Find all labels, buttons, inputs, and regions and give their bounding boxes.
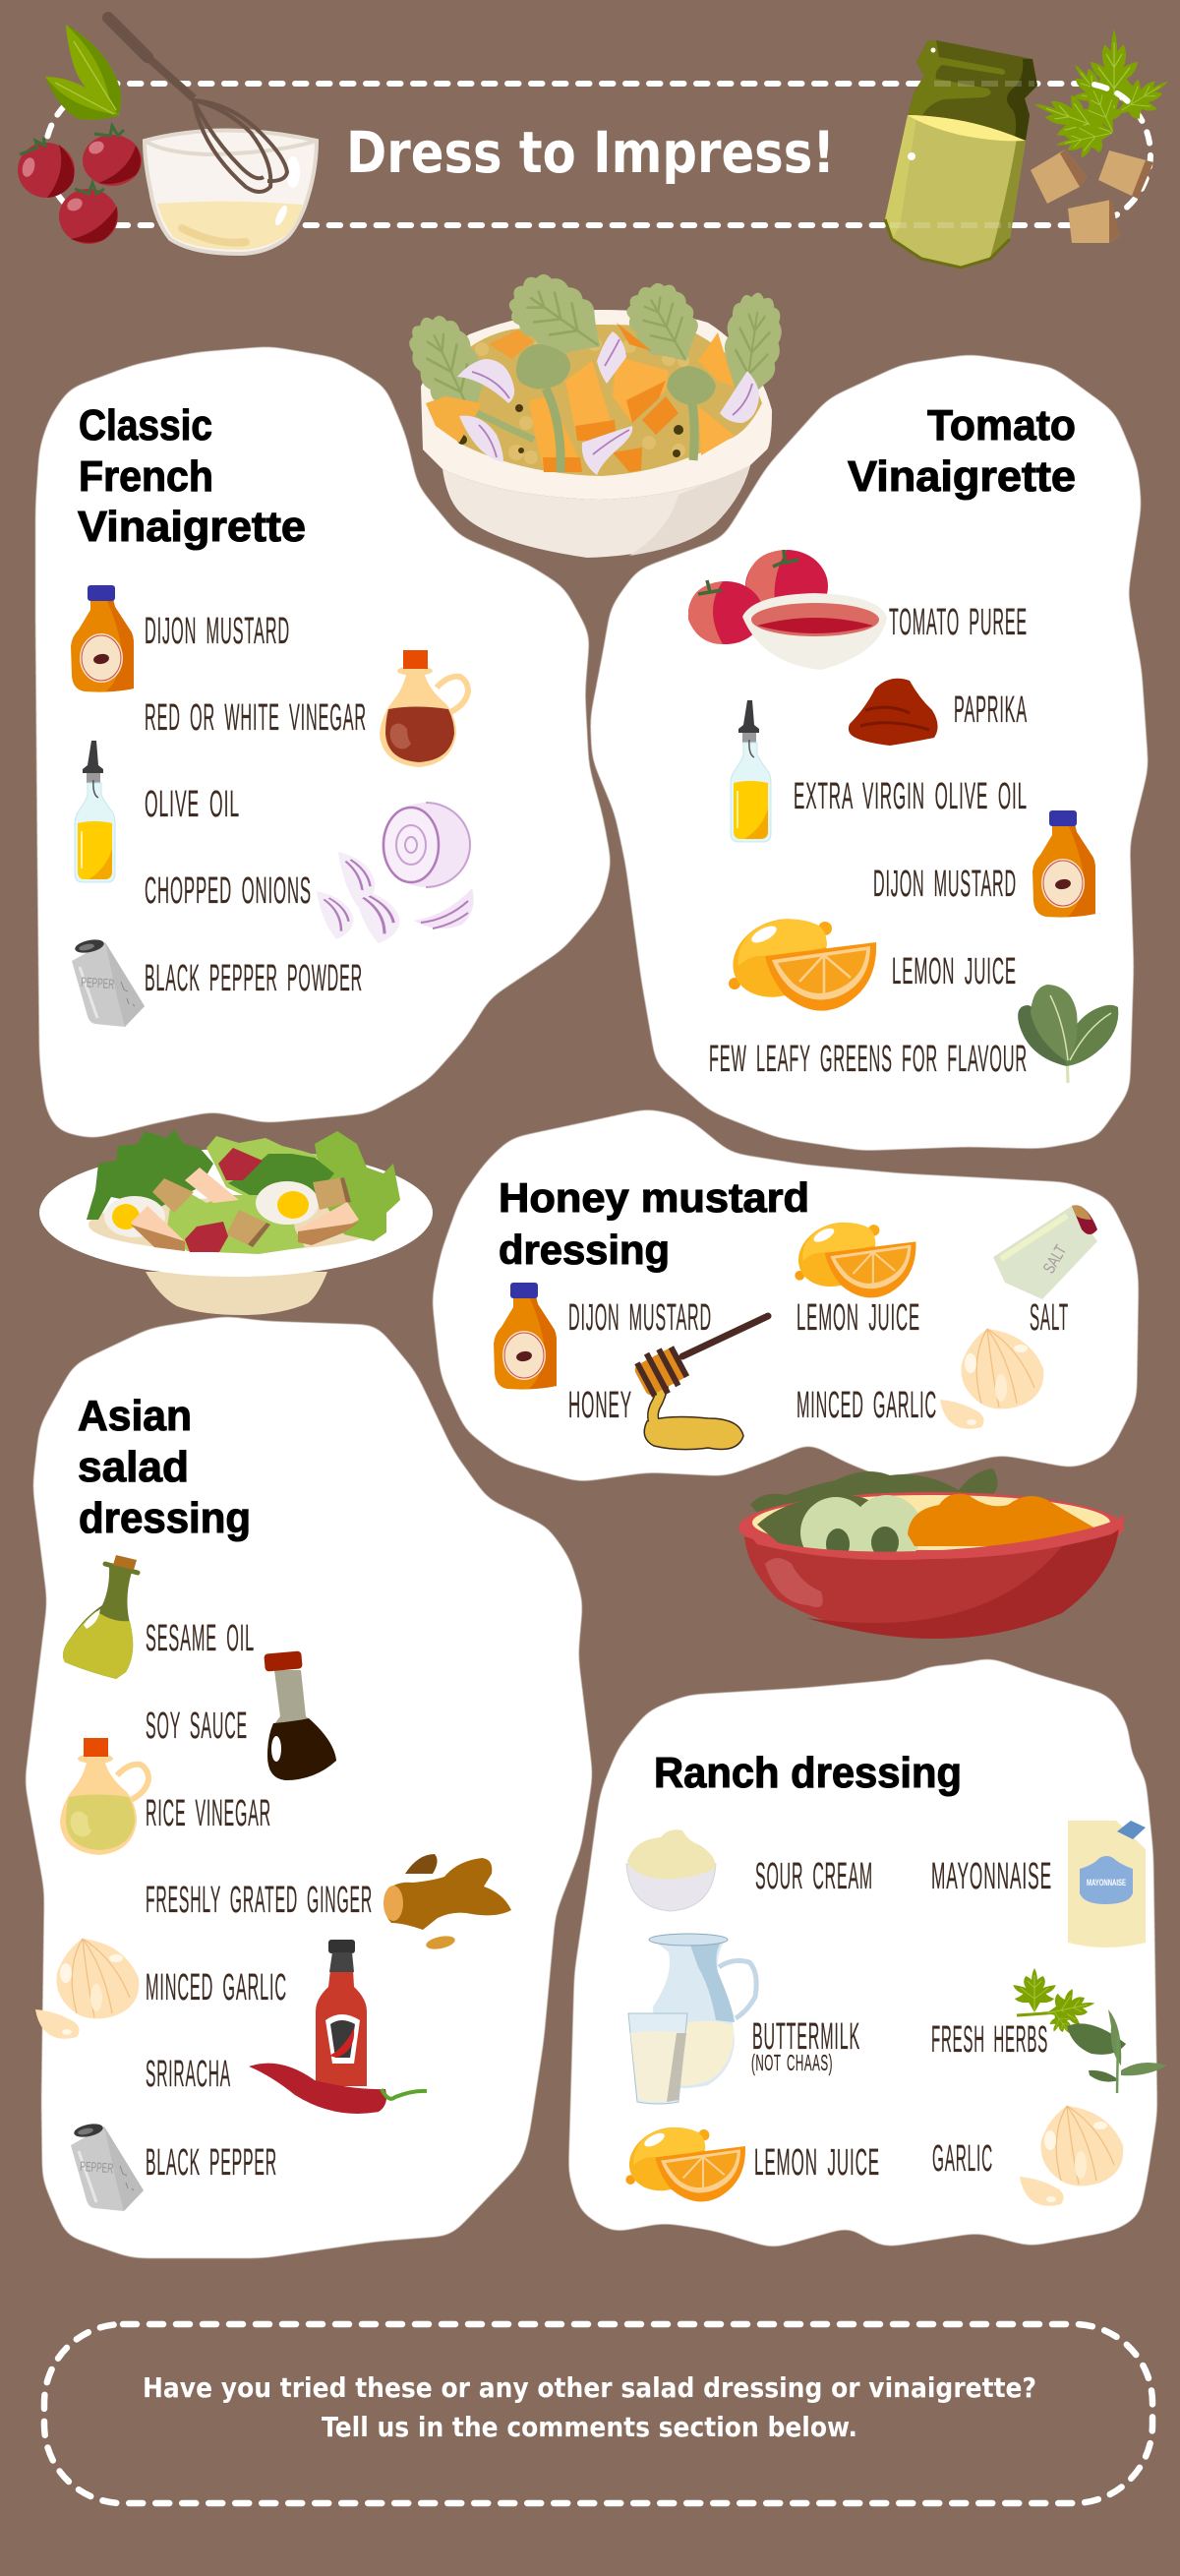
heading: Asian	[78, 1392, 192, 1440]
panel: classic french vinaigrette: OLIVE OIL	[145, 784, 240, 825]
ingredient: minced garlic	[35, 1939, 287, 2039]
icon: lettuce	[87, 1129, 400, 1254]
ingredient: black pepper powder	[72, 937, 363, 1027]
ingredient: rice vinegar	[60, 1738, 271, 1855]
illustration: salad bowl	[398, 261, 788, 558]
ingredient: sesame oil	[63, 1555, 255, 1679]
icon: greens	[750, 1468, 997, 1534]
heading: Classic	[79, 401, 212, 449]
icon: cherry tomatoes	[18, 126, 142, 244]
ingredient: black pepper	[71, 2122, 277, 2211]
panel: asian salad dressing: SESAME OIL	[146, 1618, 255, 1659]
ingredient: salt: SALT	[1030, 1297, 1069, 1339]
bowl body	[442, 465, 750, 558]
panel: ranch dressing: BUTTERMILK	[752, 2016, 860, 2058]
ingredient: freshly grated ginger	[146, 1854, 511, 1951]
icon: glass mixing bowl	[145, 130, 317, 254]
icon: bowl body	[744, 1525, 1119, 1639]
heading	[78, 401, 306, 551]
icon: bowl rim	[738, 1492, 1124, 1563]
icon: basil leaves	[45, 25, 121, 120]
callout dashed frame	[44, 2324, 1152, 2503]
icon: chicken strips	[131, 1168, 359, 1251]
heading: French	[79, 452, 213, 501]
icon: croutons	[1031, 150, 1153, 243]
ingredient: lemon juice	[789, 1211, 920, 1339]
panel: ranch dressing: LEMON JUICE	[754, 2142, 880, 2184]
header dashed frame	[45, 84, 1150, 225]
heading	[78, 1392, 251, 1542]
panel: asian salad dressing: RICE VINEGAR	[146, 1793, 271, 1834]
panel: honey mustard dressing: LEMON JUICE	[796, 1297, 920, 1339]
ingredient: salt: SALT	[1039, 1242, 1070, 1277]
onion pieces	[457, 331, 759, 475]
heading: Tomato	[927, 401, 1076, 449]
ingredient: olive oil	[75, 741, 240, 882]
broccoli	[516, 344, 716, 472]
ingredient: garlic: GARLIC	[932, 2138, 993, 2180]
header illustration: jar, parsley and croutons	[885, 30, 1177, 268]
ingredient: dijon mustard	[494, 1283, 712, 1390]
lentil shadows	[457, 404, 683, 457]
ingredient: lemon juice	[620, 2117, 880, 2201]
icon: plate	[39, 1149, 433, 1277]
heading: Vinaigrette	[848, 452, 1076, 501]
ingredient: chopped onions: CHOPPED ONIONS	[145, 870, 312, 912]
panel: tomato vinaigrette: LEMON JUICE	[892, 951, 1017, 992]
bowl rim	[421, 310, 772, 500]
illustration: red salad bowl	[738, 1468, 1124, 1639]
panel: honey mustard dressing	[432, 1108, 1139, 1482]
icon: plate base	[146, 1272, 327, 1315]
ingredient: red or white vinegar: RED OR WHITE VINEGAR	[145, 697, 367, 739]
header illustration: whisk in bowl, tomatoes and basil	[18, 18, 317, 254]
icon: olive oil jar	[885, 40, 1037, 268]
panel: asian salad dressing	[25, 1316, 593, 2258]
ingredient: garlic	[932, 2106, 1123, 2206]
icon: orange pile	[908, 1494, 1097, 1546]
heading	[499, 1174, 809, 1273]
ingredient: honey	[568, 1316, 768, 1450]
heading: salad	[78, 1443, 189, 1491]
icon: radish	[185, 1148, 263, 1252]
heading: Vinaigrette	[78, 503, 306, 551]
callout text: Tell us in the comments section below.	[322, 2411, 857, 2443]
ingredient: dijon mustard	[873, 810, 1095, 918]
ingredient: tomato puree	[688, 550, 1028, 670]
ingredient: sriracha	[146, 1940, 427, 2114]
ingredient: freshly grated ginger: FRESHLY GRATED GINGER	[146, 1880, 373, 1921]
panel: classic french vinaigrette: DIJON MUSTARD	[145, 611, 290, 652]
icon: cucumbers	[800, 1495, 922, 1568]
ingredient: red or white vinegar	[145, 650, 468, 767]
salad mass	[433, 325, 762, 476]
ingredient: fresh herbs	[931, 1968, 1167, 2093]
ingredient: soy sauce	[146, 1650, 336, 1780]
panel: tomato vinaigrette: PAPRIKA	[954, 689, 1028, 731]
ingredient: buttermilk: (NOT CHAAS)	[751, 2050, 833, 2075]
ingredient: lemon juice	[721, 905, 1017, 1011]
panel: classic french vinaigrette	[35, 346, 612, 1139]
ingredient: soy sauce: SOY SAUCE	[146, 1706, 248, 1747]
panel: classic french vinaigrette: BLACK PEPPER POWDER	[145, 958, 363, 999]
ingredient: dijon mustard	[71, 585, 290, 692]
ingredient: salt	[993, 1205, 1097, 1339]
heading	[848, 401, 1076, 501]
heading: Honey mustard	[499, 1174, 809, 1221]
illustration: caesar salad plate	[39, 1129, 433, 1315]
panel: ranch dressing	[568, 1657, 1167, 2248]
heading: dressing	[79, 1494, 251, 1542]
ingredient: honey: HONEY	[568, 1385, 632, 1426]
ingredient: buttermilk	[628, 1934, 860, 2104]
ingredient: minced garlic	[796, 1329, 1043, 1429]
heading: dressing	[499, 1227, 670, 1273]
chickpeas	[475, 323, 729, 464]
callout text	[143, 2371, 1036, 2443]
salad leaves	[398, 261, 788, 440]
heading: Ranch dressing	[654, 1749, 962, 1797]
ingredient: minced garlic: MINCED GARLIC	[796, 1385, 937, 1426]
ingredient: paprika	[849, 679, 1028, 746]
ingredient: extra virgin olive oil	[731, 700, 1028, 842]
ingredient: sriracha: SRIRACHA	[146, 2054, 231, 2095]
ingredient: sour cream	[626, 1829, 873, 1911]
icon: croutons	[152, 1177, 351, 1247]
ingredient: mayonnaise: MAYONNAISE	[1087, 1878, 1126, 1887]
panel: asian salad dressing: BLACK PEPPER	[146, 2142, 277, 2184]
ingredient: chopped onions	[145, 803, 474, 943]
panel: asian salad dressing: MINCED GARLIC	[146, 1967, 287, 2008]
footer callout	[44, 2324, 1152, 2503]
icon: whisk	[108, 18, 287, 192]
panel: ranch dressing: SOUR CREAM	[755, 1856, 873, 1897]
icon: parsley	[1027, 30, 1177, 162]
title: Dress to Impress!	[346, 119, 835, 186]
ingredient: mayonnaise	[931, 1821, 1146, 1947]
callout text: Have you tried these or any other salad dressing or vinaigrette?	[143, 2371, 1036, 2404]
orange pieces	[426, 323, 735, 472]
icon: eggs	[104, 1181, 319, 1237]
panel: tomato vinaigrette	[590, 354, 1149, 1151]
panel: honey mustard dressing: DIJON MUSTARD	[568, 1297, 712, 1339]
ingredient: few leafy greens	[709, 985, 1118, 1083]
